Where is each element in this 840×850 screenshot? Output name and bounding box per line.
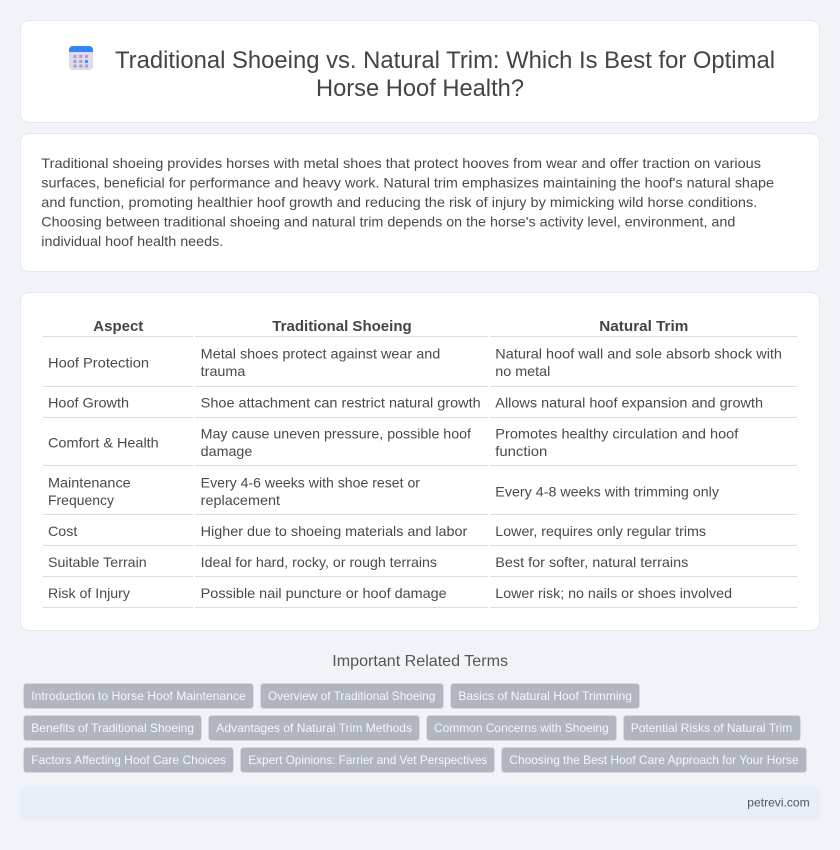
tag: Expert Opinions: Farrier and Vet Perspectives	[248, 753, 487, 767]
table header row: Aspect	[93, 318, 143, 335]
footer	[20, 786, 820, 820]
tag	[450, 684, 640, 708]
row: suitable terrain: Ideal for hard, rocky, or rough terrains	[201, 554, 437, 570]
table header row	[43, 318, 797, 337]
row: hoof protection: no metal	[495, 363, 550, 379]
row: maintenance frequency: Every 4-6 weeks with shoe reset or	[201, 474, 420, 490]
related term tags	[24, 684, 806, 772]
row: hoof protection	[43, 345, 797, 387]
panel: introduction text: Traditional shoeing provides horses with metal shoes that protect hooves from wear and offer traction on various	[41, 155, 761, 171]
row: hoof growth	[43, 394, 797, 418]
panel: introduction text: surfaces, beneficial for performance and heavy work. Natural trim emphasizes maintaining the hoof's natural shape	[41, 174, 774, 190]
row: comfort and health	[43, 425, 797, 466]
panel: title header	[20, 20, 820, 122]
title	[115, 47, 775, 102]
title: Horse Hoof Health?	[316, 75, 524, 102]
panel: comparison table	[20, 292, 820, 630]
row: maintenance frequency: Maintenance	[48, 474, 131, 490]
row: hoof growth: Allows natural hoof expansion and growth	[495, 394, 763, 410]
row: risk of injury: Possible nail puncture or hoof damage	[201, 585, 447, 601]
table header row: Natural Trim	[599, 318, 688, 335]
tag: Introduction to Horse Hoof Maintenance	[31, 689, 246, 703]
tag	[426, 716, 616, 740]
row: risk of injury: Lower risk; no nails or shoes involved	[495, 585, 732, 601]
row: hoof growth: Shoe attachment can restrict natural growth	[201, 394, 481, 410]
tag	[502, 748, 806, 772]
tag: Choosing the Best Hoof Care Approach for Your Horse	[509, 753, 799, 767]
row: comfort and health: Promotes healthy circulation and hoof	[495, 425, 738, 441]
row: hoof growth: Hoof Growth	[48, 394, 129, 410]
row: hoof protection: Metal shoes protect against wear and	[201, 345, 440, 361]
row: comfort and health: damage	[201, 443, 253, 459]
row: suitable terrain: Best for softer, natural terrains	[495, 554, 688, 570]
row: maintenance frequency: Frequency	[48, 492, 114, 508]
row: risk of injury: Risk of Injury	[48, 585, 130, 601]
row: cost: Lower, requires only regular trims	[495, 523, 706, 539]
tag: Advantages of Natural Trim Methods	[216, 721, 412, 735]
tag	[260, 684, 444, 708]
table header row: Traditional Shoeing	[272, 318, 412, 335]
row: cost: Cost	[48, 523, 77, 539]
panel: introduction text	[20, 134, 820, 272]
tag	[624, 716, 800, 740]
row: cost: Higher due to shoeing materials and labor	[201, 523, 468, 539]
tag	[24, 684, 254, 708]
tag	[24, 748, 234, 772]
tag: Benefits of Traditional Shoeing	[31, 721, 194, 735]
row: suitable terrain: Suitable Terrain	[48, 554, 147, 570]
title: Traditional Shoeing vs. Natural Trim: Which Is Best for Optimal	[115, 47, 775, 74]
row: comfort and health: Comfort & Health	[48, 434, 159, 450]
row: comfort and health: function	[495, 443, 547, 459]
row: hoof protection: trauma	[201, 363, 246, 379]
icon: calendar	[69, 46, 93, 70]
tag: Potential Risks of Natural Trim	[631, 721, 792, 735]
row: maintenance frequency	[43, 474, 797, 515]
tag	[24, 716, 202, 740]
row: hoof protection: Hoof Protection	[48, 354, 149, 370]
tag: Common Concerns with Shoeing	[434, 721, 609, 735]
row: cost	[43, 523, 797, 546]
row: maintenance frequency: Every 4-8 weeks with trimming only	[495, 483, 719, 499]
row: risk of injury	[43, 585, 797, 608]
tag	[208, 716, 420, 740]
panel: introduction text: individual hoof health needs.	[41, 233, 223, 249]
panel: introduction text: Choosing between traditional shoeing and natural trim depends on the horse's activity level, environment, and	[41, 214, 735, 230]
row: suitable terrain	[43, 554, 797, 577]
panel: introduction text: and function, promoting healthier hoof growth and reducing the risk of injury by mimicking wild horse conditions.	[41, 194, 757, 210]
tag: Factors Affecting Hoof Care Choices	[31, 753, 226, 767]
heading: important related terms: Important Related Terms	[332, 653, 508, 670]
row: maintenance frequency: replacement	[201, 492, 280, 508]
footer: petrevi.com	[747, 796, 810, 810]
tag	[240, 748, 494, 772]
tag: Basics of Natural Hoof Trimming	[458, 689, 632, 703]
row: hoof protection: Natural hoof wall and sole absorb shock with	[495, 345, 782, 361]
tag: Overview of Traditional Shoeing	[268, 689, 435, 703]
row: comfort and health: May cause uneven pressure, possible hoof	[201, 425, 471, 441]
